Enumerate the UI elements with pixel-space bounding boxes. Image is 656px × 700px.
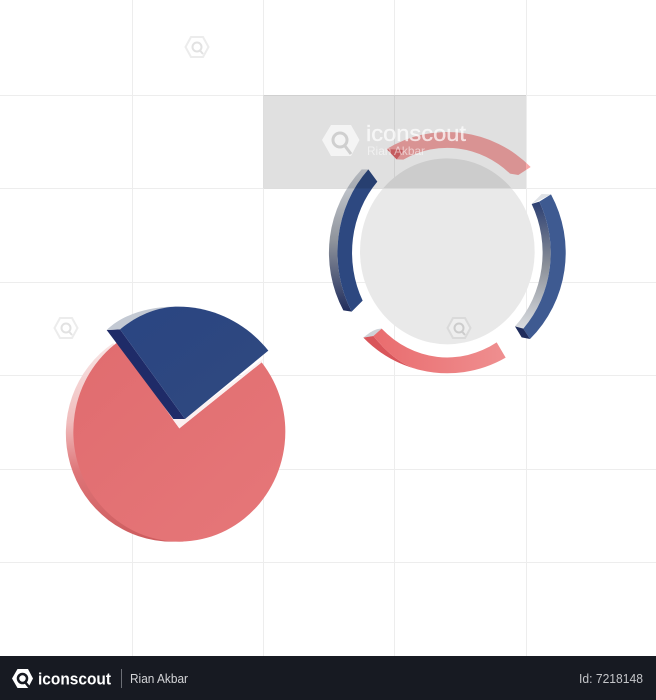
large watermark name: iconscout <box>366 121 466 146</box>
right navy arc <box>515 194 566 339</box>
navy wedge face <box>120 307 268 419</box>
center disc <box>360 158 535 344</box>
small watermark icon left <box>54 318 78 338</box>
left navy arc <box>329 169 377 312</box>
pie rim <box>66 343 183 542</box>
footer bar <box>0 656 656 700</box>
large watermark author: Rian Akbar <box>367 144 425 158</box>
pie chart <box>66 307 285 542</box>
pie main face <box>73 342 285 542</box>
footer id: Id: 7218148 <box>579 671 643 686</box>
top pink arc side <box>387 149 404 159</box>
navy wedge side <box>107 329 185 419</box>
ring chart <box>329 132 566 373</box>
notch highlight <box>173 359 263 428</box>
footer author: Rian Akbar <box>130 671 189 686</box>
footer divider <box>121 669 122 688</box>
navy wedge light edge <box>107 307 178 330</box>
small watermark icon disc <box>448 318 470 338</box>
top pink arc <box>387 132 531 175</box>
watermark panel <box>264 95 526 188</box>
footer logo <box>12 669 33 688</box>
large watermark logo <box>322 125 360 156</box>
footer brand name: iconscout <box>38 670 111 688</box>
small watermark icon top <box>186 37 208 57</box>
bottom pink arc <box>363 329 506 373</box>
